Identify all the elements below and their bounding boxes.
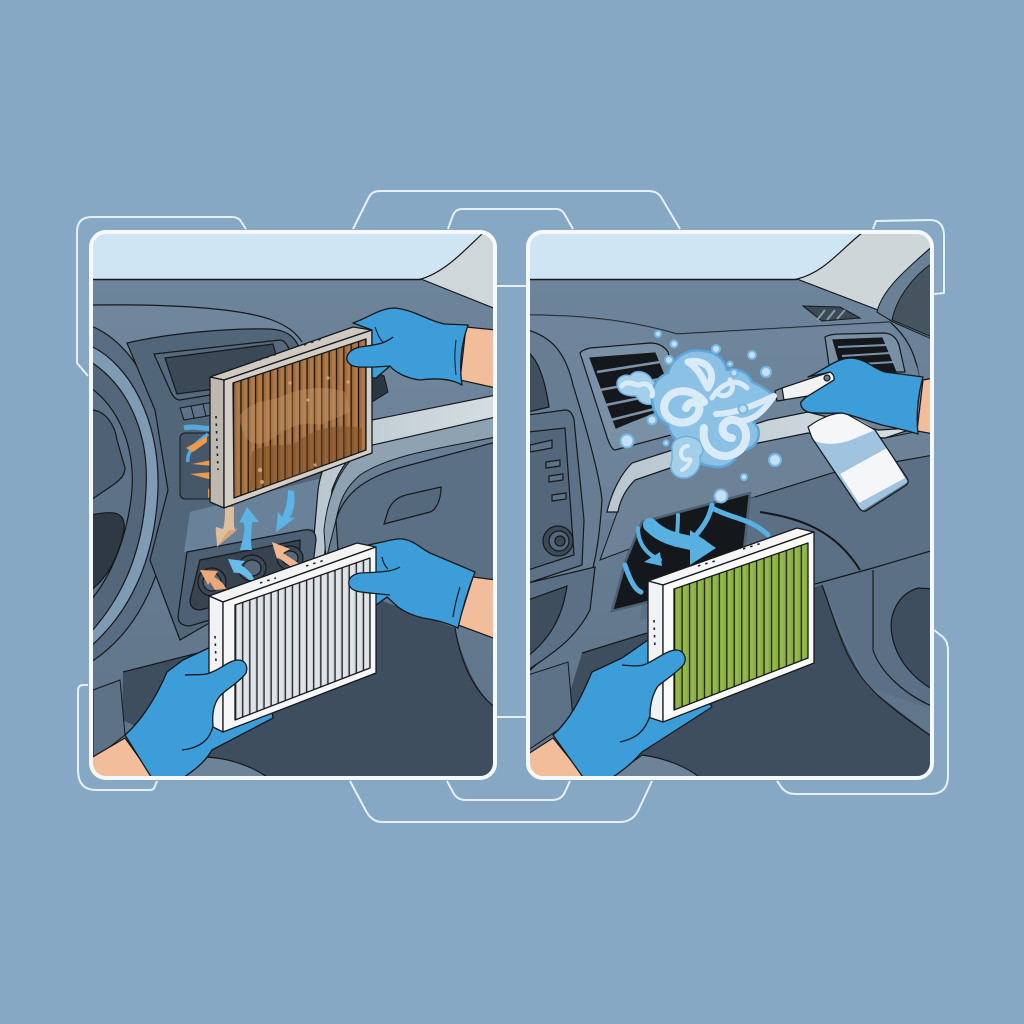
dashboard base — [528, 280, 932, 780]
arrow: tan down — [216, 507, 237, 547]
windshield pillar — [797, 233, 934, 310]
arrow: peach up-left left — [200, 570, 226, 590]
defrost vent — [803, 306, 860, 321]
airflow arrows between filters — [200, 490, 300, 590]
panel: right, spray and new filter — [528, 232, 934, 780]
glove thumb: lower left — [600, 650, 685, 748]
arrow: blue up-left — [228, 559, 254, 580]
droplets — [620, 331, 781, 502]
trigger neck — [806, 390, 835, 412]
right vent behind glove — [372, 374, 388, 402]
panel: right white border — [528, 232, 932, 778]
airflow arrows in housing — [625, 505, 768, 592]
glove box handle — [384, 487, 441, 524]
lower console with knobs — [178, 530, 316, 626]
nozzle — [775, 372, 834, 401]
swirls — [622, 361, 774, 470]
sky through windshield — [91, 232, 495, 280]
seat arc — [188, 756, 266, 776]
button row — [179, 402, 210, 421]
windshield pillar — [421, 233, 496, 309]
arm: upper — [461, 326, 493, 388]
second trim band — [600, 428, 934, 560]
dashboard upper line — [528, 315, 920, 380]
arm: lower left — [528, 738, 587, 780]
glove: lower left, rear — [553, 640, 712, 780]
right air vent — [825, 333, 905, 372]
arm: spray hand — [917, 378, 934, 434]
spray cloud — [617, 331, 781, 502]
arrow: blue up — [239, 507, 259, 550]
steering shroud — [91, 326, 171, 662]
centre stack — [127, 329, 326, 640]
glove thumb: lower left — [165, 660, 247, 750]
glove box — [335, 442, 493, 579]
arm: lower right — [459, 576, 493, 638]
brown pleats — [233, 339, 366, 498]
floor — [122, 600, 496, 780]
glove thumb: lower right — [349, 572, 377, 594]
lower silver trim — [312, 395, 496, 560]
bottle label band — [840, 448, 905, 503]
panel: left white border — [91, 232, 495, 778]
glove: lower left, rear — [125, 645, 273, 780]
infographic canvas — [76, 190, 949, 823]
clean white filter — [209, 543, 376, 732]
decorative outline frames behind panels — [77, 191, 948, 822]
lower dash panel — [640, 455, 934, 710]
screen — [154, 340, 300, 400]
lower puff — [671, 436, 703, 478]
bottle body — [808, 413, 908, 511]
dust stains — [240, 388, 350, 444]
dirty filter — [210, 327, 372, 508]
dashboard upper curve — [91, 305, 496, 560]
left vent with mixed airflow — [180, 424, 210, 500]
green pleats — [674, 543, 808, 710]
spray bottle — [775, 372, 908, 511]
panel: left, dirty filter removal — [91, 232, 496, 780]
right lower console — [873, 560, 934, 707]
arrow: blue curved down — [276, 490, 295, 532]
silver trim — [607, 412, 915, 512]
steering shroud and left stack — [528, 330, 602, 672]
green filter — [648, 528, 814, 722]
main cloud — [652, 350, 775, 467]
bottle outline — [808, 413, 908, 511]
radio knob — [543, 526, 573, 556]
glove: lower right, rear — [368, 539, 475, 628]
side markings — [216, 338, 324, 470]
arm: lower left — [93, 737, 150, 776]
bottle collar — [808, 413, 875, 444]
dashboard base — [91, 280, 495, 780]
small left puff — [617, 372, 660, 404]
white pleats — [235, 558, 370, 720]
left air vent — [580, 343, 690, 450]
glove: spray hand — [801, 358, 923, 434]
sky through windshield — [528, 232, 932, 280]
band between upper stack and knobs — [184, 478, 322, 552]
floor — [560, 585, 934, 780]
arrow: peach up-left right — [272, 542, 300, 566]
glove: upper — [347, 308, 468, 385]
filter body — [210, 327, 372, 380]
seat arc — [608, 755, 703, 780]
cabin filter housing opening — [612, 493, 750, 611]
side door area — [877, 245, 934, 340]
